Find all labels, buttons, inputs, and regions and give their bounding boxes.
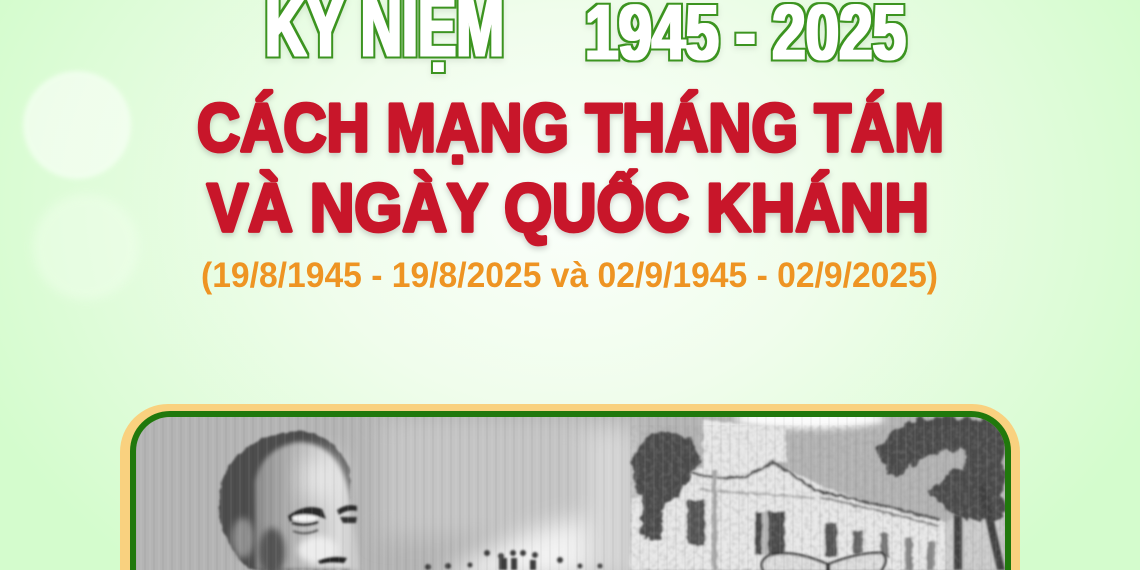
photo: grain on building: [630, 425, 1005, 570]
title line 2: VÀ NGÀY QUỐC KHÁNH: [207, 169, 929, 246]
photo: crowd: [425, 550, 602, 570]
portrait: cheek highlight: [298, 536, 338, 564]
photo: sky and square tones: [380, 417, 640, 570]
portrait: shadow on left of face: [259, 528, 285, 570]
photo: windows: [687, 500, 705, 545]
frame: outer cream border: [120, 404, 1020, 570]
photo: dark trees: [632, 417, 1004, 540]
photo frame: [120, 404, 1020, 570]
title line 1: CÁCH MẠNG THÁNG TÁM: [197, 90, 944, 166]
photo: portrait of the leader: [219, 431, 360, 570]
photo: butterfly ornament: [762, 553, 886, 570]
photo: tree trunks: [954, 480, 1005, 570]
portrait: brows and eyes: [288, 505, 357, 564]
decorative bokeh circles: [23, 71, 139, 300]
frame: green border: [130, 411, 1011, 570]
photo: bright sky band: [733, 417, 887, 433]
photo: building: [630, 420, 1004, 570]
photo: halftone stripes: [221, 417, 1005, 569]
date range subtitle: (19/8/1945 - 19/8/2025 và 02/9/1945 - 02/9/2025): [201, 256, 938, 295]
historic photograph: [136, 409, 1005, 570]
portrait: face: [255, 442, 360, 570]
portrait: hair: [219, 431, 350, 570]
portrait: ear: [232, 518, 254, 558]
portrait: forehead highlight: [302, 454, 342, 502]
